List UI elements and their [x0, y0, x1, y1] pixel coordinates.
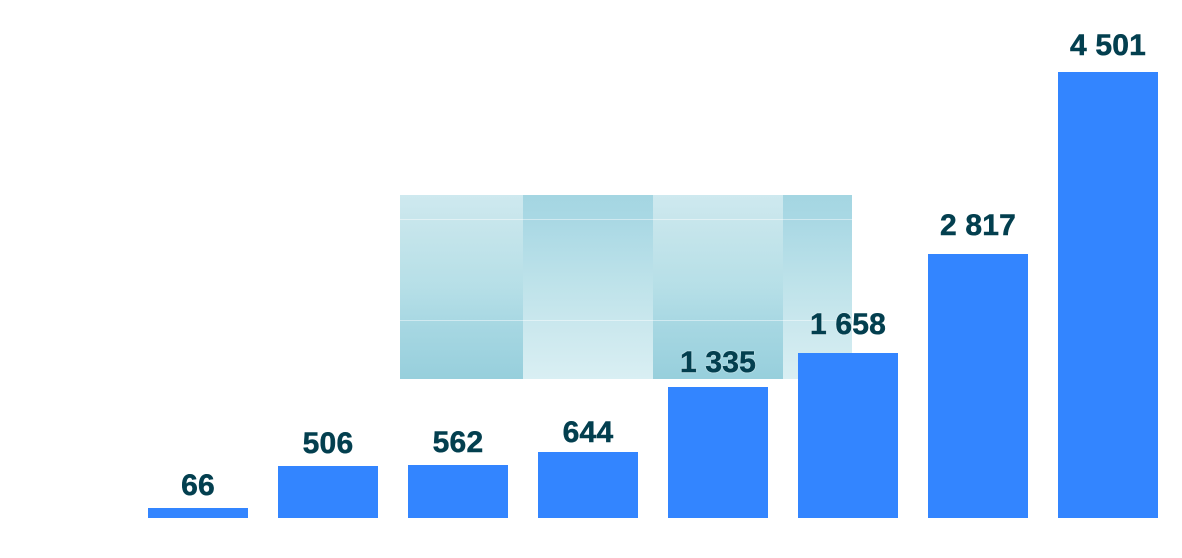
bar chart — [148, 29, 1158, 518]
bar: 4 501: 4 501 — [1070, 29, 1146, 62]
panel: background image band — [400, 195, 852, 379]
bar: 66 — [148, 469, 248, 518]
bar: 1 658 — [798, 308, 898, 518]
bar: 4 501 — [1058, 29, 1158, 518]
bar: 66: 66 — [181, 469, 215, 502]
bar: 2 817 — [928, 209, 1028, 518]
bar: 1 658: 1 658 — [810, 308, 886, 341]
bar: 2 817: 2 817 — [940, 209, 1016, 242]
bar: 644: 644 — [563, 416, 613, 449]
bar: 562: 562 — [433, 426, 483, 459]
bar: 506 — [278, 427, 378, 518]
bar: 506: 506 — [303, 427, 353, 460]
bar: 644 — [538, 416, 638, 518]
bar: 562 — [408, 426, 508, 518]
bar: 1 335 — [668, 346, 768, 518]
bar: 1 335: 1 335 — [680, 346, 756, 379]
